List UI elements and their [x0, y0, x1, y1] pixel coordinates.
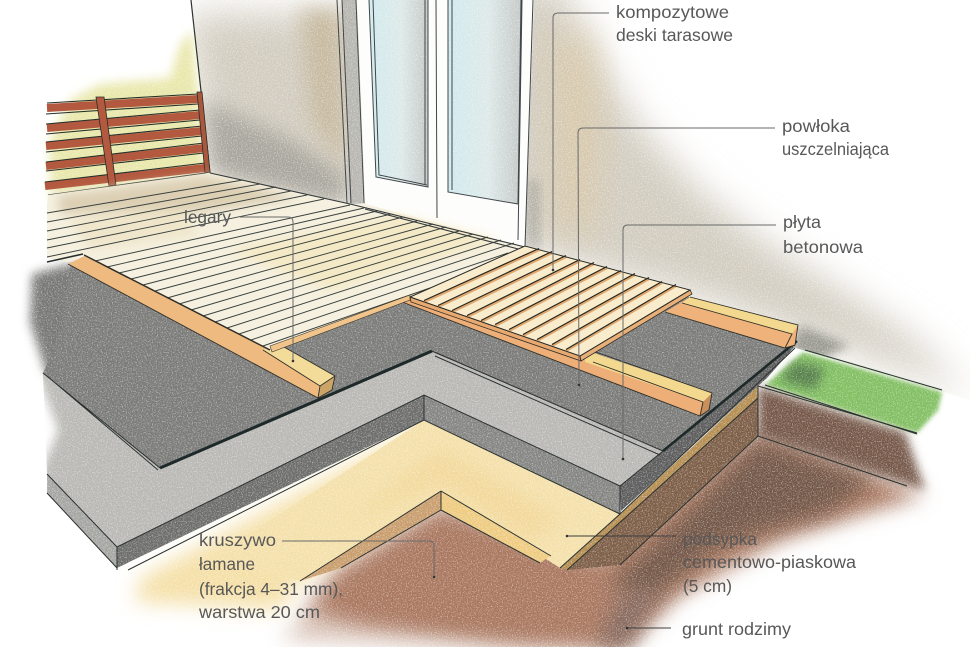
- label: powłoka uszczelniająca: uszczelniająca: [782, 139, 889, 159]
- label: kruszywo łamane: (frakcja 4–31 mm),: [199, 579, 343, 599]
- label: legary: legary: [184, 207, 231, 227]
- joist: right: [665, 297, 798, 348]
- fence: red-brown slats: [45, 92, 210, 195]
- label: kompozytowe deski tarasowe: [552, 2, 733, 271]
- decking: composite boards, left section: [47, 173, 525, 352]
- label: podsypka cementowo-piaskowa: cementowo-piaskowa: [683, 552, 856, 572]
- label: podsypka cementowo-piaskowa: [566, 529, 856, 596]
- joist: middle: [397, 295, 712, 416]
- label: podsypka cementowo-piaskowa: podsypka: [683, 529, 757, 549]
- layer: cement-sand bedding side: [560, 386, 758, 570]
- label: płyta betonowa: płyta: [783, 212, 821, 232]
- layer: concrete slab, light grey: [43, 341, 797, 568]
- label: grunt rodzimy: grunt rodzimy: [682, 619, 791, 639]
- fade: soft left edge of the painted slab: [0, 360, 105, 600]
- label: legary: [184, 207, 294, 362]
- label: płyta betonowa: [622, 212, 863, 460]
- label: powłoka uszczelniająca: powłoka: [782, 116, 850, 136]
- label: kruszywo łamane: łamane: [199, 554, 255, 574]
- label: kompozytowe deski tarasowe: kompozytowe: [616, 2, 729, 22]
- wall: plastered facade: [185, 0, 970, 395]
- label: podsypka cementowo-piaskowa: (5 cm): [683, 576, 732, 596]
- decking: front edge: [84, 255, 270, 350]
- decking: board gap lines: [47, 180, 514, 346]
- grass strip: [765, 352, 942, 433]
- layer: sealed concrete top, dark grey: [30, 264, 797, 468]
- door: terrace door: [342, 0, 534, 247]
- layer: crushed aggregate, yellow: [135, 420, 620, 610]
- label: kompozytowe deski tarasowe: deski tarasowe: [616, 25, 733, 45]
- label: powłoka uszczelniająca: [578, 116, 889, 386]
- label: kruszywo łamane: kruszywo: [199, 530, 276, 550]
- ground: native soil: [275, 386, 925, 647]
- label: kruszywo łamane: [198, 530, 435, 622]
- joist: left: [68, 256, 335, 398]
- label: płyta betonowa: betonowa: [783, 237, 863, 257]
- label: kruszywo łamane: warstwa 20 cm: [198, 602, 320, 622]
- decking: composite boards, exposed right section: [410, 246, 692, 361]
- backdrop: yellow-green foliage behind fence: [50, 30, 206, 196]
